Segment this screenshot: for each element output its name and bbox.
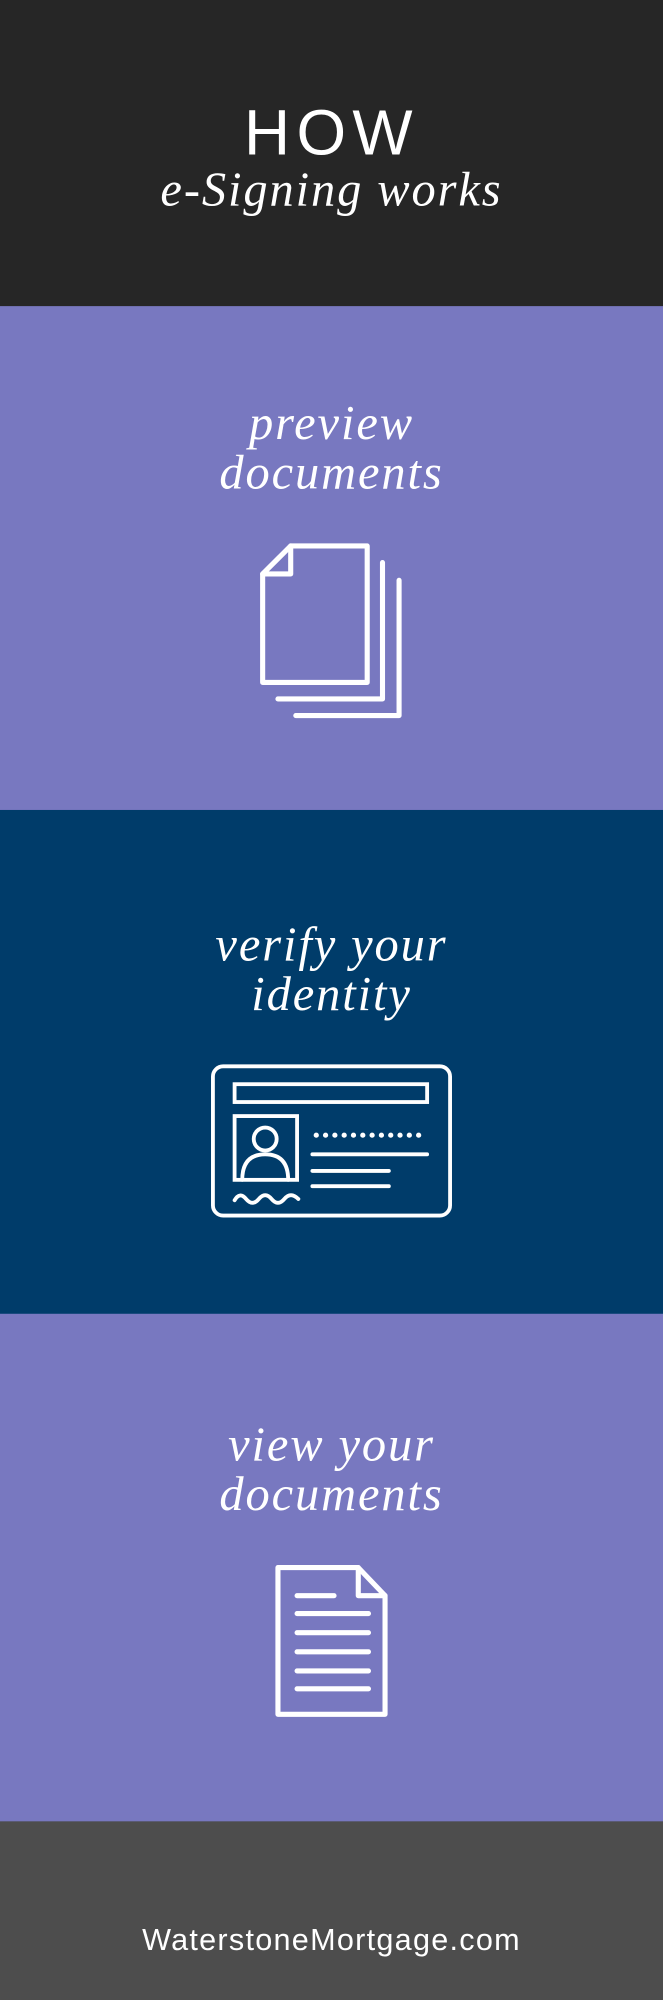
panel: verify your identity	[0, 810, 663, 1315]
panel: view your documents	[0, 1314, 663, 1821]
subtitle: e-Signing works	[160, 163, 503, 216]
heading: view your documents: view your	[228, 1418, 435, 1471]
footer url: WaterstoneMortgage.com	[142, 1923, 521, 1957]
panel: verify your identity: identity	[251, 968, 412, 1021]
panel: preview documents: documents	[219, 447, 444, 500]
heading: preview documents: preview	[246, 397, 414, 450]
icon: document stack	[263, 546, 399, 716]
heading: verify your identity: verify your	[215, 918, 448, 971]
icon: ID card	[213, 1066, 450, 1216]
title: HOW: HOW	[244, 96, 419, 168]
panel: view your documents: documents	[219, 1468, 444, 1521]
footer	[0, 1821, 663, 2000]
header panel	[0, 0, 663, 306]
icon: single document	[278, 1568, 385, 1714]
panel: preview documents	[0, 306, 663, 811]
